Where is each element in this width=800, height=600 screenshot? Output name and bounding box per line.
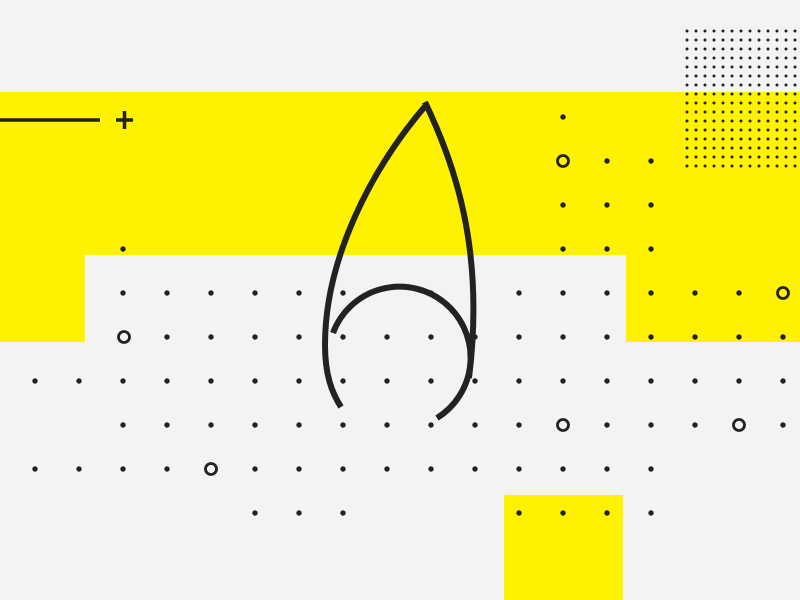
line and plus [0,111,133,129]
yellow background shape [0,92,800,342]
dot grid [32,114,786,516]
ring markers [118,156,788,474]
yellow bottom block [504,495,623,600]
fine dot grid [683,27,800,171]
icon: flame [325,102,473,418]
